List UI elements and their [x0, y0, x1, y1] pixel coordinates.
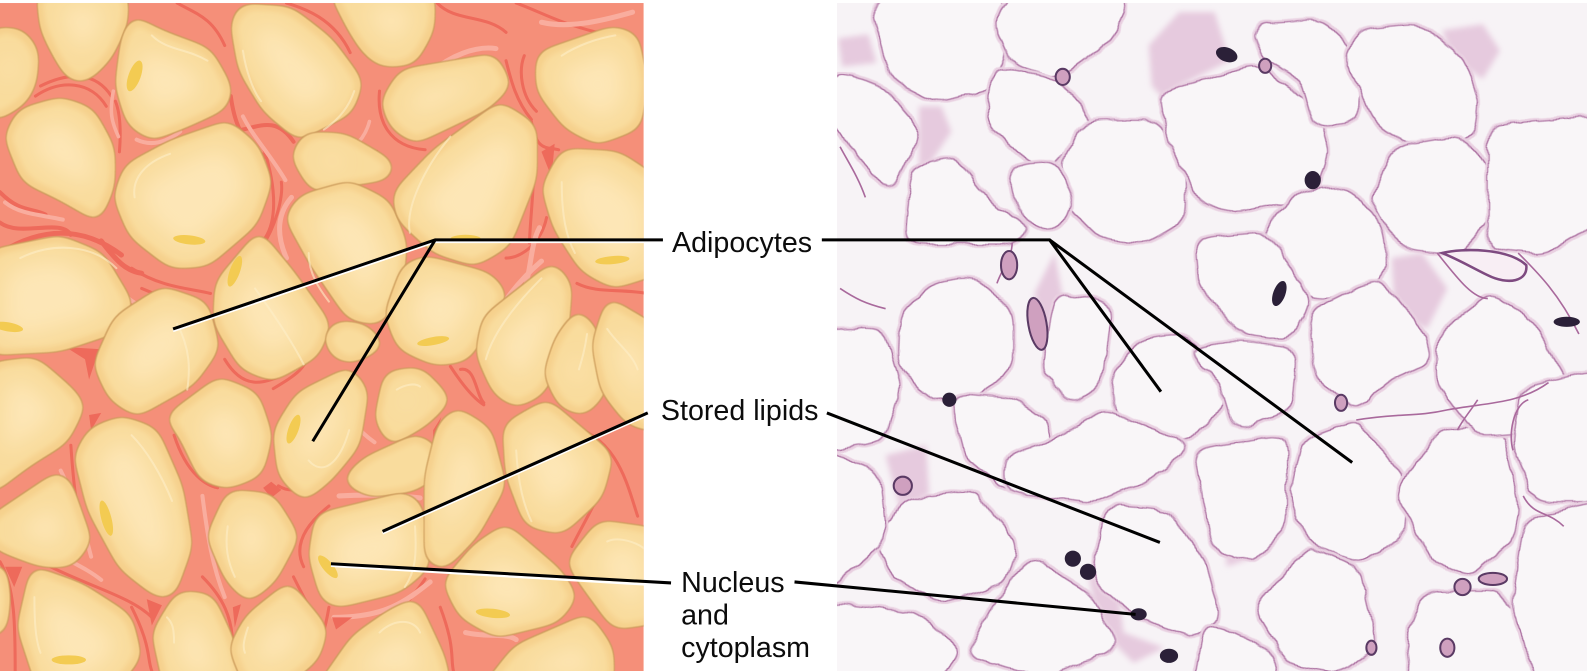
label: Adipocytes: Adipocytes: [672, 227, 812, 259]
pink cytoplasm patches: [838, 12, 1500, 663]
connective tissue strands: [0, 3, 648, 671]
leader lines: Stored lipids: [383, 413, 1160, 542]
nuclei: [0, 59, 630, 664]
label: Nucleus and cytoplasm: and: [681, 599, 729, 631]
specular highlights on cells: [20, 35, 648, 653]
leader line highlights: [173, 242, 671, 586]
label: Nucleus and cytoplasm: [681, 567, 810, 664]
label: Stored lipids: Stored lipids: [661, 395, 818, 427]
fat cell membranes: [825, 0, 1587, 671]
leader lines: Nucleus and cytoplasm: [331, 564, 1136, 614]
panel: micrograph of adipose tissue: [825, 0, 1587, 671]
label: Nucleus and cytoplasm: cytoplasm: [681, 632, 810, 664]
junction wedges: [5, 142, 555, 630]
leader lines: Adipocytes left: [173, 240, 663, 441]
darker adipocyte: [0, 472, 92, 567]
label: Nucleus and cytoplasm: Nucleus: [681, 567, 785, 599]
dark nuclei: [942, 44, 1580, 663]
panel: illustration of adipose tissue: [0, 0, 662, 671]
thin jagged membranes: [840, 147, 1579, 526]
ring-shaped nuclei and capillaries: [894, 59, 1507, 657]
leader lines: Adipocytes right: [822, 240, 1352, 463]
vessel loop: [1442, 250, 1526, 281]
pale fibres: [5, 12, 633, 640]
adipocyte cells: [0, 0, 662, 671]
